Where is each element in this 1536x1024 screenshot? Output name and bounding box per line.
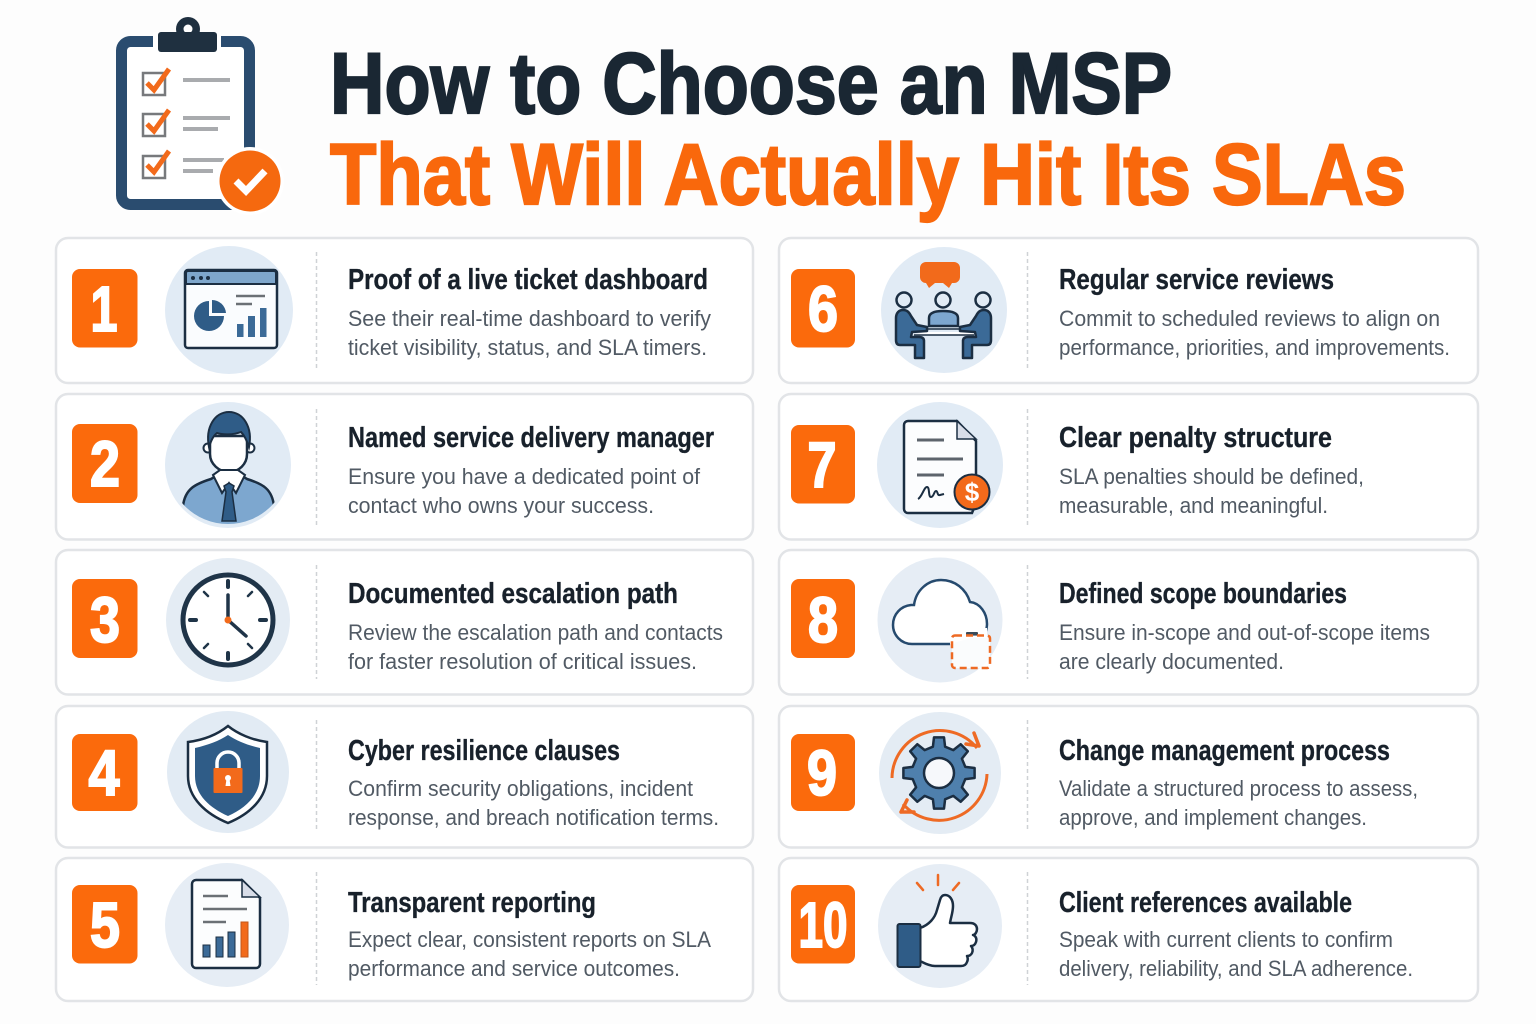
text: item 4: response, and breach notification terms.: [348, 805, 719, 830]
title: [330, 36, 1406, 223]
number badge 10: 10: [798, 889, 848, 961]
text: item 10: [1059, 887, 1413, 981]
text: item 7: SLA penalties should be defined,: [1059, 464, 1364, 489]
text: item 10: Speak with current clients to confirm: [1059, 927, 1393, 952]
text: item 2: Named service delivery manager: [348, 422, 714, 454]
title: That Will Actually Hit Its SLAs: [330, 127, 1406, 223]
number badge 10: [791, 885, 855, 964]
text: item 6: Commit to scheduled reviews to align on: [1059, 306, 1440, 331]
text: item 3: for faster resolution of critical issues.: [348, 649, 697, 674]
text: item 8: Ensure in-scope and out-of-scope items: [1059, 620, 1430, 645]
icon: clipboard checklist: [122, 17, 284, 215]
number badge 8: [791, 579, 855, 658]
number badge 5: [72, 885, 138, 964]
icon: penalty contract: $: [965, 477, 980, 507]
text: item 1: [348, 264, 711, 360]
text: item 9: Validate a structured process to assess,: [1059, 776, 1418, 801]
number badge 7: [791, 425, 855, 504]
icon: service manager: [165, 402, 291, 530]
number badge 1: 1: [90, 273, 118, 345]
number badge 4: 4: [88, 737, 120, 809]
panel: item 9: [779, 706, 1478, 848]
number badge 7: 7: [808, 429, 836, 501]
text: item 10: delivery, reliability, and SLA adherence.: [1059, 956, 1413, 981]
text: item 1: Proof of a live ticket dashboard: [348, 264, 708, 296]
number badge 8: 8: [808, 584, 838, 656]
text: item 1: See their real-time dashboard to verify: [348, 306, 711, 331]
number badge 2: 2: [90, 428, 120, 500]
text: item 2: Ensure you have a dedicated point of: [348, 464, 701, 489]
panel: item 7: [779, 394, 1478, 540]
panel: item 6: [779, 238, 1478, 383]
number badge 3: 3: [90, 584, 120, 656]
panel: item 1: [56, 238, 753, 383]
icon: dashboard: [165, 246, 293, 374]
text: item 10: Client references available: [1059, 887, 1352, 919]
text: item 9: approve, and implement changes.: [1059, 805, 1367, 830]
text: item 6: performance, priorities, and improvements.: [1059, 335, 1450, 360]
number badge 1: [72, 269, 138, 348]
text: item 4: Confirm security obligations, incident: [348, 776, 693, 801]
number badge 6: [791, 269, 855, 348]
icon: thumbs up: [878, 864, 1002, 988]
icon: report: [165, 863, 289, 987]
number badge 3: [72, 579, 138, 658]
icon: change management gear: [879, 712, 1001, 834]
text: item 6: Regular service reviews: [1059, 264, 1334, 296]
panel: item 10: [779, 858, 1478, 1001]
text: item 7: Clear penalty structure: [1059, 422, 1332, 454]
text: item 7: [1059, 422, 1364, 518]
text: item 5: [348, 887, 711, 981]
number badge 9: 9: [807, 737, 837, 809]
title: How to Choose an MSP: [330, 36, 1172, 132]
text: item 9: [1059, 735, 1418, 830]
text: item 7: measurable, and meaningful.: [1059, 493, 1328, 518]
panel: item 4: [56, 706, 753, 848]
panel: item 8: [779, 550, 1478, 694]
text: item 3: Documented escalation path: [348, 578, 678, 610]
text: item 1: ticket visibility, status, and SLA timers.: [348, 335, 707, 360]
text: item 3: [348, 578, 723, 674]
icon: penalty contract: [877, 402, 1003, 528]
number badge 5: 5: [90, 889, 120, 961]
text: item 2: [348, 422, 714, 518]
text: item 8: Defined scope boundaries: [1059, 578, 1347, 610]
number badge 2: [72, 424, 138, 503]
text: item 4: [348, 735, 719, 830]
text: item 3: Review the escalation path and contacts: [348, 620, 723, 645]
text: item 9: Change management process: [1059, 735, 1390, 767]
text: item 8: [1059, 578, 1430, 674]
text: item 2: contact who owns your success.: [348, 493, 654, 518]
text: item 5: Expect clear, consistent reports on SLA: [348, 927, 711, 952]
text: item 8: are clearly documented.: [1059, 649, 1284, 674]
text: item 4: Cyber resilience clauses: [348, 735, 620, 767]
text: item 5: performance and service outcomes.: [348, 956, 680, 981]
number badge 9: [791, 734, 855, 811]
text: item 5: Transparent reporting: [348, 887, 596, 919]
icon: meeting: [881, 247, 1007, 373]
text: item 6: [1059, 264, 1450, 360]
number badge 6: 6: [808, 273, 838, 345]
icon: security shield: [167, 711, 289, 833]
panel: item 3: [56, 550, 753, 694]
icon: clock: [166, 558, 290, 682]
panel: item 5: [56, 858, 753, 1001]
panel: item 2: [56, 394, 753, 540]
icon: cloud scope: [878, 558, 1002, 682]
number badge 4: [72, 734, 138, 811]
